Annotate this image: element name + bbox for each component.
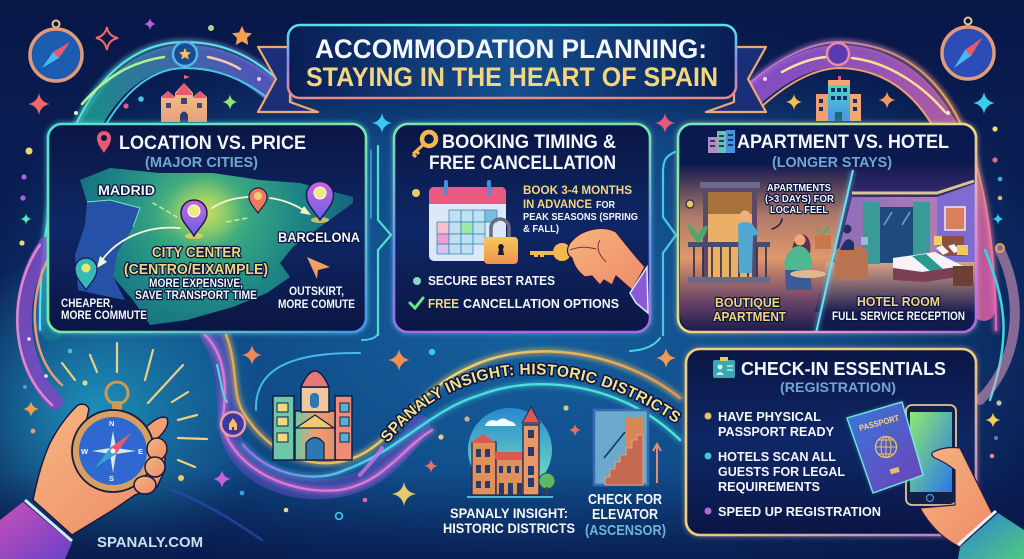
compass rays	[62, 343, 207, 467]
bullet dot	[413, 277, 421, 285]
sleeve	[0, 502, 72, 559]
booking advice line 2 end: FOR	[596, 199, 615, 211]
label: apartment: APARTMENT	[713, 309, 786, 324]
map note: more commute: MORE COMMUTE	[61, 310, 147, 322]
illustration: elevator and stairs	[594, 410, 661, 485]
booking advice line 1: BOOK 3-4 MONTHS	[523, 183, 632, 197]
compass body: E	[138, 447, 143, 456]
panel border	[678, 124, 976, 332]
curved insight banner: SPANALY INSIGHT: HISTORIC DISTRICTS	[380, 362, 682, 443]
map label: Barcelona: BARCELONA	[278, 230, 360, 245]
bullet text: guests for legal: GUESTS FOR LEGAL	[718, 464, 845, 479]
neon connectors between panels	[371, 146, 676, 335]
illustration: apartment and hotel	[680, 165, 976, 335]
heading: CHECK-IN ESSENTIALS	[741, 358, 946, 379]
map label: centro eixample: (CENTRO/EIXAMPLE)	[124, 262, 268, 278]
apartment note line 3: LOCAL FEEL	[770, 204, 829, 216]
subheading: (LONGER STAYS)	[772, 154, 892, 171]
heading: LOCATION VS. PRICE	[119, 133, 306, 154]
panel: apartment vs hotel	[678, 124, 976, 335]
icon: hand holding phone	[920, 448, 1024, 559]
neon route: lower left band	[17, 245, 62, 405]
panel frame	[678, 124, 976, 332]
icon: passport	[847, 402, 923, 493]
hotel room	[815, 181, 976, 312]
icon: passport: PASSPORT	[858, 412, 901, 433]
panel: check-in essentials	[686, 349, 1024, 559]
title box	[288, 25, 736, 98]
compass body: N	[109, 419, 114, 428]
title line 2: STAYING IN THE HEART OF SPAIN	[306, 62, 718, 92]
map note: outskirt: OUTSKIRT,	[289, 286, 344, 298]
person on balcony	[738, 210, 760, 273]
cuff	[25, 500, 72, 541]
label: check for: CHECK FOR	[588, 491, 662, 508]
panel: location vs price	[48, 124, 366, 332]
pointer arrow	[772, 219, 782, 229]
bullet dots	[704, 412, 712, 514]
compass body: W	[81, 447, 89, 456]
map note: more expensive: MORE EXPENSIVE,	[149, 278, 243, 290]
bullet: free: FREE	[428, 296, 459, 311]
compass body: S	[109, 474, 114, 483]
subheading: (REGISTRATION)	[780, 379, 896, 395]
icon: buildings	[708, 130, 735, 153]
icon: compass top right	[942, 18, 994, 79]
bullet text: requirements: REQUIREMENTS	[718, 479, 820, 494]
bullet text: hotels scan all: HOTELS SCAN ALL	[718, 449, 836, 464]
fingers	[134, 438, 167, 494]
ribbon right tail	[706, 47, 766, 112]
bullet: secure best rates: SECURE BEST RATES	[428, 273, 555, 288]
map label: city center: CITY CENTER	[152, 245, 241, 261]
label: spanaly insight: SPANALY INSIGHT:	[450, 505, 568, 521]
bullet text: have physical: HAVE PHYSICAL	[718, 409, 821, 424]
bullet dot	[412, 189, 420, 197]
icon: location pin	[97, 131, 111, 153]
map label: Madrid: MADRID	[98, 183, 155, 198]
illustration: hand holding compass	[0, 343, 207, 559]
icon: castle	[161, 75, 207, 122]
ribbon left tail	[258, 47, 318, 112]
icon: check mark	[410, 298, 423, 308]
illustration: historic district	[467, 407, 555, 498]
label: boutique: BOUTIQUE	[715, 295, 780, 310]
icon: calendar with lock	[429, 180, 518, 264]
icon: key	[413, 132, 436, 157]
booking advice line 3: PEAK SEASONS (SPRING	[523, 211, 638, 223]
neon route: winding road	[172, 334, 680, 540]
booking advice line 2: IN ADVANCE	[523, 197, 592, 211]
route arrows	[97, 197, 311, 268]
pin: route midpoint	[249, 188, 267, 213]
apartment note line 2: (>3 DAYS) FOR	[765, 193, 834, 205]
bullet text: speed up registration: SPEED UP REGISTRATION	[718, 504, 881, 519]
pin: outskirts	[75, 258, 97, 290]
bullet: cancellation options: CANCELLATION OPTIONS	[463, 296, 619, 311]
icon: hand with key	[530, 228, 648, 313]
heading line 2: FREE CANCELLATION	[429, 153, 616, 174]
booking advice line 4: & FALL)	[523, 223, 559, 235]
panel frame	[394, 124, 650, 332]
icon: phone	[906, 405, 956, 505]
pin: city center	[181, 200, 207, 239]
illustration: palace	[273, 371, 352, 460]
heading line 1: BOOKING TIMING &	[442, 132, 616, 153]
bullet text: passport ready: PASSPORT READY	[718, 424, 834, 439]
apartment note line 1: APARTMENTS	[767, 182, 831, 194]
apartment balcony	[686, 182, 770, 283]
icon: id badge	[713, 357, 735, 378]
icon: compass top left	[30, 20, 82, 81]
panel frame	[48, 124, 366, 332]
compass body	[72, 382, 154, 492]
label: full service reception: FULL SERVICE RECEPTION	[832, 311, 965, 323]
panel: booking timing	[394, 124, 650, 332]
subheading: (MAJOR CITIES)	[145, 154, 258, 171]
map of Spain	[75, 168, 353, 325]
pin: Barcelona	[306, 182, 334, 223]
label: historic districts: HISTORIC DISTRICTS	[443, 520, 575, 536]
map note: save transport time: SAVE TRANSPORT TIME	[135, 290, 257, 302]
title line 1: ACCOMMODATION PLANNING:	[315, 34, 707, 64]
neon route: top right arc	[742, 42, 1015, 400]
woman at table	[784, 227, 831, 290]
neon route: top left arc	[40, 42, 290, 330]
panel frame	[686, 349, 976, 535]
title banner	[258, 25, 766, 112]
label: elevator: ELEVATOR	[592, 506, 658, 523]
label: hotel room: HOTEL ROOM	[857, 294, 940, 309]
icon: hotel tower	[816, 76, 861, 121]
label: ascensor: (ASCENSOR)	[585, 522, 666, 539]
hand	[33, 404, 168, 535]
heading: APARTMENT VS. HOTEL	[737, 132, 949, 153]
map note: cheaper: CHEAPER,	[61, 298, 113, 310]
map note: more comute: MORE COMUTE	[278, 299, 355, 311]
footer brand: SPANALY.COM	[97, 534, 203, 551]
icon: outskirt arrow	[307, 257, 330, 279]
